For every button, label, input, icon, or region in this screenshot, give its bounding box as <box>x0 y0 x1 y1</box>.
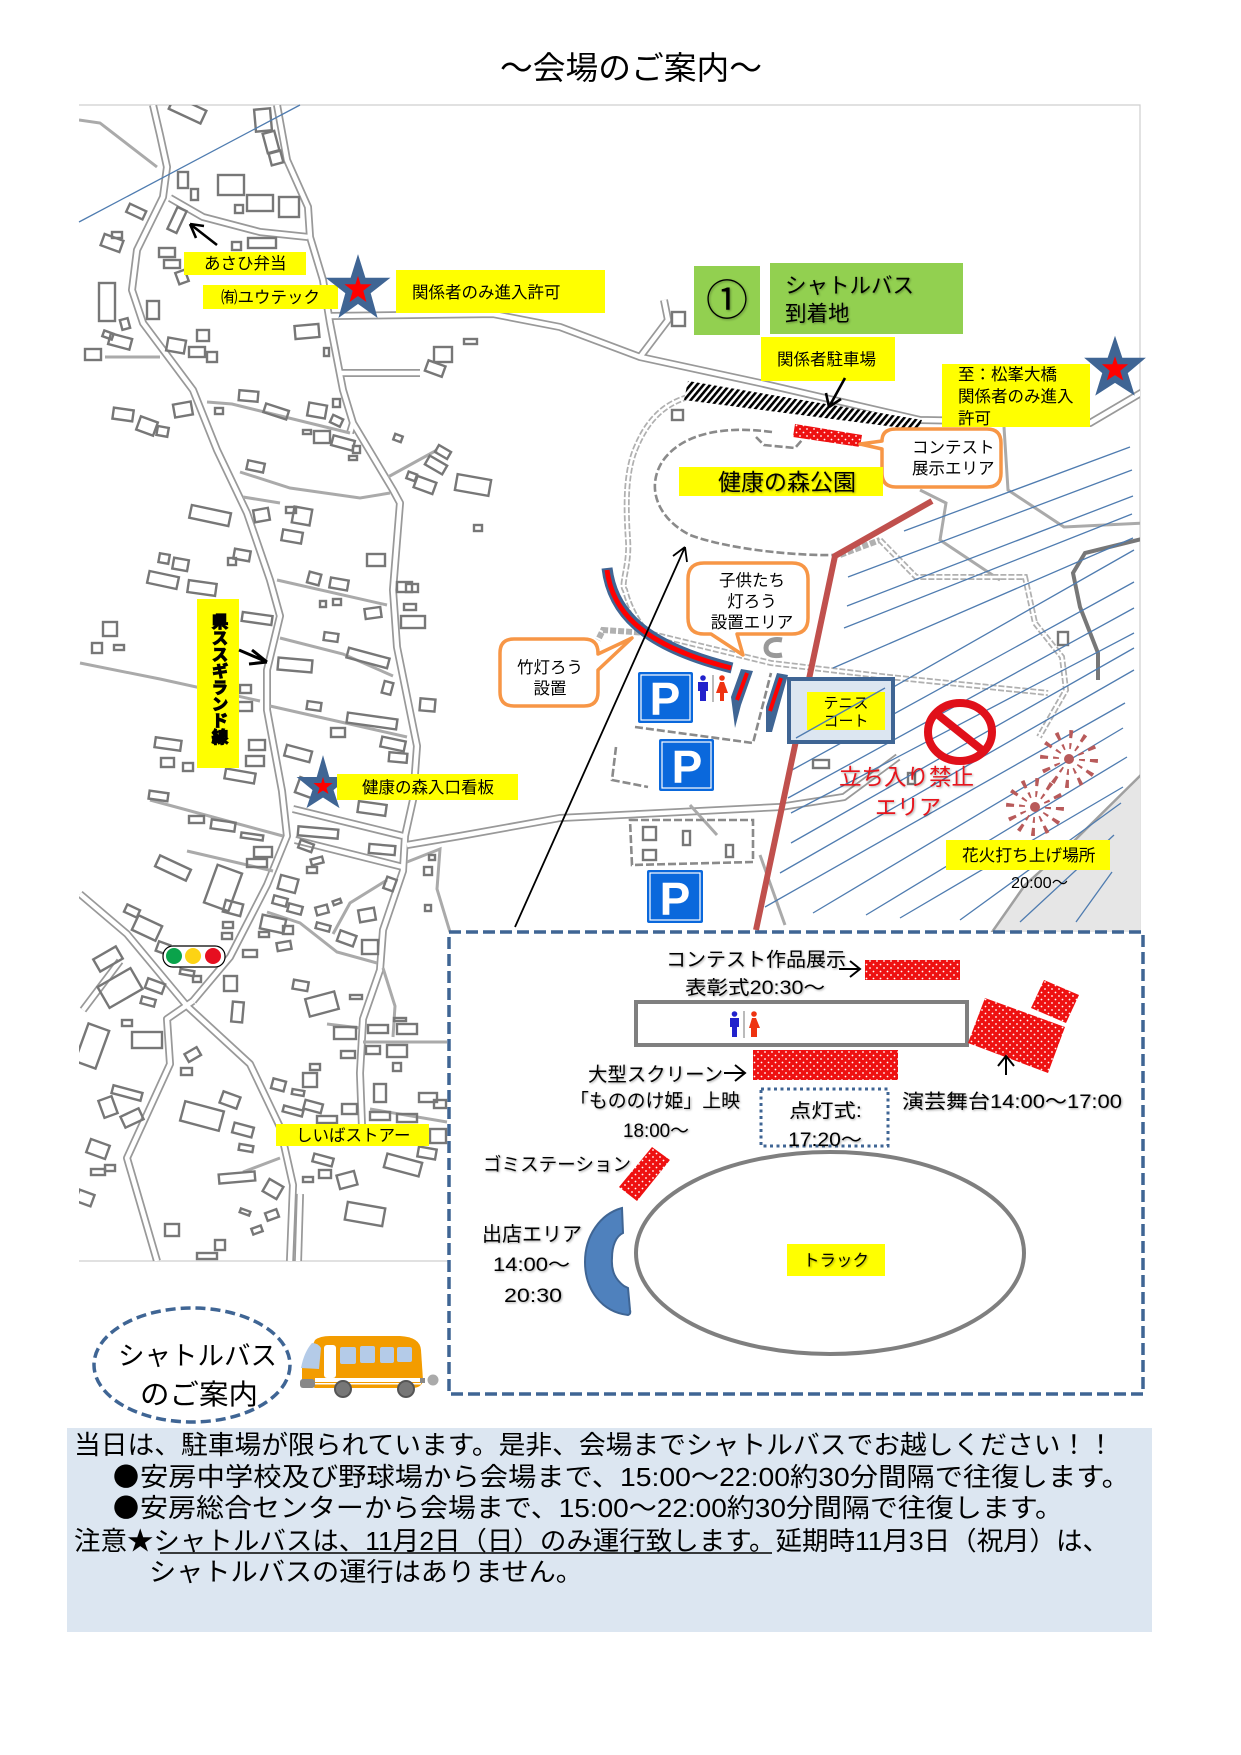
icon: parking 1: P <box>650 673 680 725</box>
label: track <box>787 1244 885 1276</box>
track <box>636 1152 1024 1354</box>
text: large screen: 大型スクリーン <box>588 1064 723 1086</box>
text: line 2: 安房中学校及び野球場から会場まで、15:00〜22:00約30分間隔で往復します。 <box>140 1462 1130 1492</box>
river area <box>995 778 1140 932</box>
icon: parking 3: P <box>660 873 690 925</box>
map frame <box>79 105 1140 1261</box>
badge: shuttle bus info <box>94 1308 290 1422</box>
text: line 5: シャトルバスの運行はありません。 <box>149 1557 583 1587</box>
label: 関係者のみ進入許可 <box>396 270 605 313</box>
callout: children's lanterns <box>688 563 808 655</box>
text: stage: 演芸舞台14:00〜17:00 <box>902 1091 1122 1113</box>
label: 健康の森入口看板: 健康の森入口看板 <box>362 778 494 797</box>
text: contest display: コンテスト作品展示 <box>666 949 846 971</box>
callout: children's lanterns: 設置エリア <box>711 613 793 632</box>
panel: base map <box>75 96 1146 1262</box>
icon: parking 3 <box>647 870 703 925</box>
callout: bamboo lanterns: 設置 <box>534 679 566 698</box>
badge: shuttle bus info: シャトルバス <box>118 1341 277 1371</box>
icon: fireworks 1 <box>1044 734 1094 784</box>
icon: traffic light <box>163 946 225 967</box>
tennis court: コート <box>823 713 869 730</box>
icon: star 1 <box>335 265 381 310</box>
houses <box>75 96 1068 1259</box>
boundary line <box>756 501 932 930</box>
text: line 4: 注意★シャトルバスは、11月2日（日）のみ運行致します。延期時11月3日（祝月）は、 <box>74 1526 1109 1556</box>
label: あさひ弁当: あさひ弁当 <box>204 254 286 273</box>
icon: shuttle bus <box>300 1336 438 1397</box>
arrow: to あさひ弁当 <box>190 224 217 245</box>
icon: parking 1 <box>638 672 693 725</box>
icon: parking 2: P <box>672 741 702 793</box>
icon: restroom map <box>698 675 728 702</box>
staff parking hatch <box>684 381 922 430</box>
arrow: staff parking <box>826 378 845 407</box>
icon: no entry <box>928 703 992 761</box>
label: 至 松峯大橋: 許可 <box>958 409 991 428</box>
stage <box>968 998 1065 1073</box>
label: あさひ弁当 <box>184 252 306 275</box>
bamboo lantern curve <box>607 568 732 668</box>
panel: venue detail <box>449 932 1143 1394</box>
side roads <box>79 120 1146 1172</box>
icon: restroom detail <box>730 1011 760 1038</box>
text: vendor area: 出店エリア <box>482 1223 582 1246</box>
text: movie: 「もののけ姫」上映 <box>570 1090 740 1112</box>
title: 〜会場のご案内〜 <box>500 50 762 86</box>
callout: contest area: 展示エリア <box>912 460 994 478</box>
text: vendor area <box>482 1223 582 1307</box>
text: awards: 表彰式20:30〜 <box>685 977 825 999</box>
text: movie time: 18:00〜 <box>623 1121 689 1142</box>
label: しいばストアー: しいばストアー <box>296 1126 411 1145</box>
callout: bamboo lanterns <box>500 638 632 706</box>
underline <box>160 1552 772 1554</box>
label: shuttle bus arrival: 到着地 <box>785 302 850 326</box>
label: 健康の森公園: 健康の森公園 <box>718 469 856 495</box>
label: shuttle bus arrival <box>770 263 963 334</box>
lighting ceremony box: 点灯式: <box>789 1100 862 1122</box>
text: no entry area <box>839 765 974 820</box>
park paths <box>598 397 1066 737</box>
label: 至 松峯大橋: 至：松峯大橋 <box>958 365 1058 384</box>
label: track: トラック <box>803 1251 869 1270</box>
garbage station <box>619 1147 670 1201</box>
icon: star 3 <box>305 766 341 801</box>
text: garbage station: ゴミステーション <box>483 1154 631 1175</box>
label: 健康の森公園 <box>679 467 883 496</box>
label: fireworks launch site: 20:00〜 <box>1011 875 1068 892</box>
arrow: zoom pointer <box>515 547 687 927</box>
diagonal map line <box>79 105 300 222</box>
bamboo lantern strip 3 <box>766 673 788 732</box>
callout: children's lanterns: 子供たち <box>719 571 785 590</box>
label: しいばストアー <box>276 1124 429 1146</box>
text: line 1: 当日は、駐車場が限られています。是非、会場までシャトルバスでお越しください！！ <box>74 1430 1114 1460</box>
text: no entry area: 立ち入り禁止 <box>839 765 974 790</box>
building outline <box>636 1002 967 1045</box>
callout: contest area: コンテスト <box>912 439 994 457</box>
contest display area <box>793 424 862 447</box>
bamboo lantern strip 2 <box>731 669 753 728</box>
C-shaped structure <box>766 639 782 656</box>
label: fireworks launch site: 花火打ち上げ場所 <box>962 846 1096 865</box>
panel: shuttle bus notes <box>67 1428 1152 1632</box>
tennis court: テニス <box>823 695 869 712</box>
label: vertical road name: 県ススギランド線 <box>209 613 228 746</box>
text: line 3: 安房総合センターから会場まで、15:00〜22:00約30分間隔で往復します。 <box>140 1493 1063 1523</box>
arrow: stage <box>998 1056 1014 1075</box>
text: no entry area: エリア <box>875 795 941 820</box>
label: vertical road name <box>197 599 239 768</box>
vendor area shape <box>585 1208 630 1315</box>
no-entry hatching <box>765 447 1134 922</box>
arrow: contest display <box>839 961 860 977</box>
label: 関係者のみ進入許可: 関係者のみ進入許可 <box>412 283 560 302</box>
contest display bar <box>865 960 960 980</box>
callout: bamboo lanterns: 竹灯ろう <box>517 658 583 677</box>
callout: contest area <box>860 429 1001 487</box>
label: shuttle bus arrival: シャトルバス <box>785 274 914 298</box>
label: ㈲ユウテック: ㈲ユウテック <box>221 288 320 307</box>
label: fireworks launch site <box>946 840 1110 892</box>
label: circled number 1: ① <box>706 277 748 324</box>
text: vendor area: 20:30 <box>504 1286 562 1307</box>
arrow: road name <box>239 650 267 664</box>
river bank <box>990 770 1146 935</box>
text: line 2: ● <box>113 1457 139 1494</box>
badge: shuttle bus info: のご案内 <box>140 1379 258 1410</box>
lighting ceremony box: 17:20〜 <box>788 1130 862 1151</box>
lighting ceremony box <box>761 1089 888 1151</box>
icon: fireworks 2 <box>1010 782 1060 832</box>
label: circled number 1 <box>694 266 760 335</box>
label: 至 松峯大橋: 関係者のみ進入 <box>958 387 1074 406</box>
stage annex <box>1031 980 1079 1023</box>
icon: star 2 <box>1093 346 1137 388</box>
label: 健康の森入口看板 <box>337 774 518 800</box>
arrow: large screen <box>724 1065 745 1081</box>
railway line <box>1073 538 1146 680</box>
label: 関係者駐車場 <box>761 337 895 381</box>
tennis court <box>789 679 893 742</box>
text: line 3: ● <box>113 1488 139 1525</box>
road network <box>80 105 1146 1262</box>
label: 至 松峯大橋 <box>942 364 1090 428</box>
icon: parking 2 <box>659 739 714 793</box>
label: ㈲ユウテック <box>203 285 338 309</box>
label: 関係者駐車場: 関係者駐車場 <box>777 350 876 369</box>
large screen bar <box>753 1050 898 1080</box>
text: vendor area: 14:00〜 <box>493 1255 570 1276</box>
callout: children's lanterns: 灯ろう <box>727 592 777 611</box>
